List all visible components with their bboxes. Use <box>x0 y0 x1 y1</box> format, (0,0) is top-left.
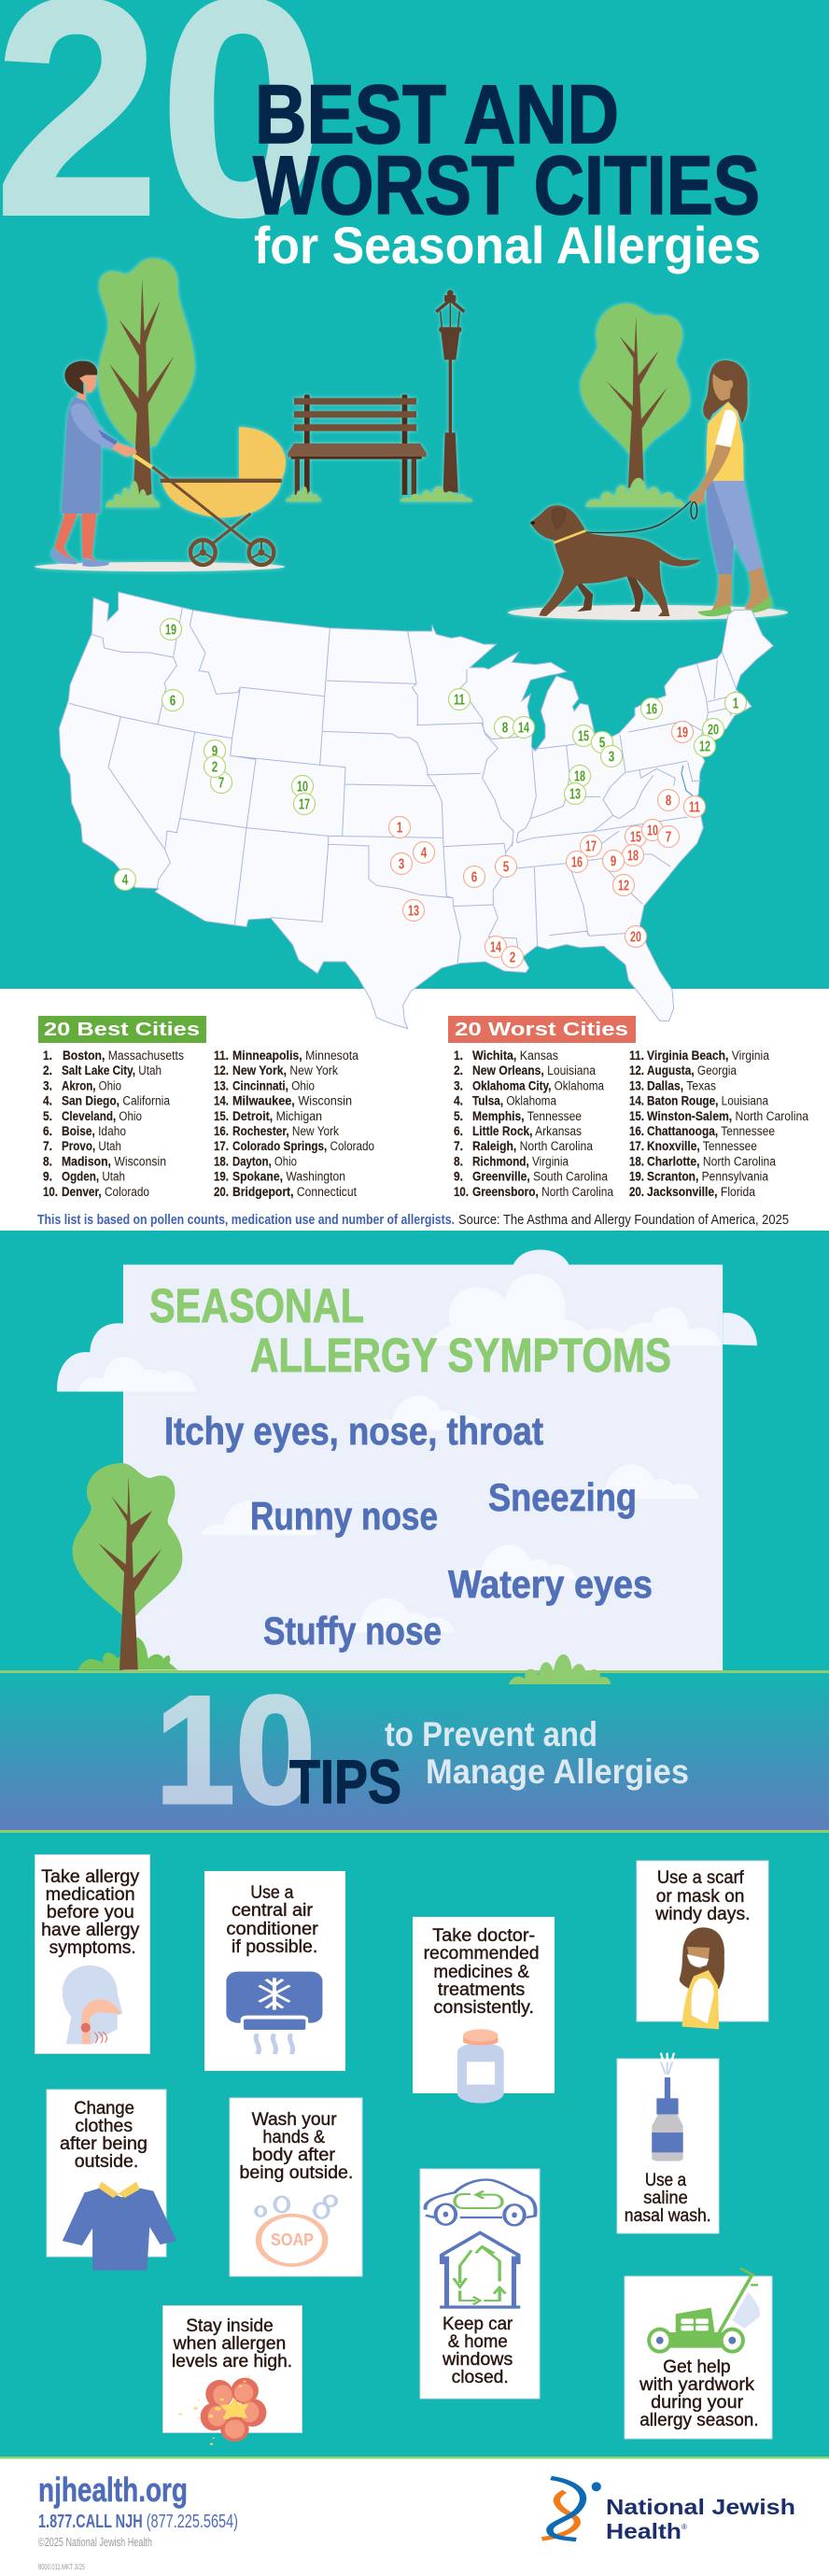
woman with stroller <box>51 361 286 567</box>
symptom: sneezing: Sneezing <box>488 1475 637 1519</box>
stroller band <box>161 479 282 483</box>
list: best cities 1 to 10 <box>43 1049 184 1199</box>
map markers: worst cities: 12 <box>618 878 629 894</box>
top <box>707 402 744 481</box>
card: yardwork <box>625 2268 772 2439</box>
card text <box>60 2099 148 2172</box>
list: best cities 11 to 20: Minneapolis, Minnesota <box>232 1049 358 1063</box>
card text: have allergy <box>41 1921 140 1940</box>
faint clouds <box>201 1396 699 1632</box>
map markers: worst cities: 16 <box>571 855 583 870</box>
list: best cities 1 to 10: 10. <box>43 1185 58 1199</box>
card text: outside. <box>75 2152 138 2172</box>
map markers: worst cities: 8 <box>666 794 672 809</box>
card text: Stay inside <box>186 2316 274 2336</box>
list: best cities 1 to 10: Salt Lake City, Utah <box>62 1063 162 1077</box>
sleeve <box>71 403 118 450</box>
list: best cities 1 to 10: 8. <box>43 1154 52 1168</box>
list: worst cities 11 to 20: 17. <box>629 1139 644 1153</box>
panel: footer <box>0 2456 829 2576</box>
map markers: worst cities: 19 <box>677 725 688 741</box>
sleeve <box>715 410 737 447</box>
panel box <box>123 1265 723 1670</box>
list: worst cities 11 to 20: 12. <box>629 1063 644 1077</box>
map markers: best cities: 6 <box>170 693 176 710</box>
hair <box>703 360 748 423</box>
list: best cities 1 to 10: 1. <box>43 1049 52 1063</box>
lamp post <box>436 290 464 492</box>
card text <box>226 1883 319 1957</box>
list: best cities 11 to 20 <box>214 1049 374 1199</box>
map markers: best cities: 15 <box>578 728 589 745</box>
list: best cities 11 to 20: Bridgeport, Connecticut <box>232 1185 357 1199</box>
icon: medicine bottle <box>457 2029 504 2104</box>
panel: teal header background <box>0 0 829 990</box>
ground ellipse right <box>508 605 788 620</box>
list: best cities 11 to 20: 20. <box>214 1185 229 1199</box>
card: scarf or mask <box>637 1861 768 2029</box>
list: best cities 11 to 20: 11. <box>214 1049 229 1063</box>
illustration: park scene <box>35 259 788 620</box>
list: best cities 1 to 10: 3. <box>43 1078 52 1092</box>
hair <box>64 361 97 394</box>
state borders <box>69 608 736 964</box>
list: worst cities 1 to 10: Greensboro, North Carolina <box>472 1185 613 1199</box>
icon: car and house <box>426 2180 536 2307</box>
bush on ground line <box>509 1654 611 1684</box>
card text: Use a <box>250 1883 294 1903</box>
card text: windy days. <box>654 1905 751 1924</box>
card text <box>424 1926 540 2018</box>
list: best cities 11 to 20: 16. <box>214 1124 229 1138</box>
card text: treatments <box>438 1980 525 2000</box>
map markers: worst cities: 17 <box>585 838 597 855</box>
icon: shirt <box>63 2182 176 2271</box>
list: worst cities 1 to 10: 10. <box>454 1185 469 1199</box>
card text: consistently. <box>433 1998 534 2018</box>
map markers: worst cities: 1 <box>397 820 403 837</box>
chesapeake bay <box>681 766 694 796</box>
card text <box>442 2315 513 2387</box>
logo <box>541 2478 795 2543</box>
heading: 20 best cities <box>38 1016 206 1043</box>
map markers: best cities: 3 <box>609 749 615 766</box>
list: best cities 11 to 20: Dayton, Ohio <box>232 1154 297 1168</box>
woman walking dog <box>585 360 773 616</box>
heading: 20 worst cities: 20 Worst Cities <box>455 1020 628 1040</box>
symptom: stuffy nose: Stuffy nose <box>263 1609 442 1653</box>
list: worst cities 11 to 20: Chattanooga, Tennessee <box>647 1124 775 1138</box>
card text <box>625 2171 711 2226</box>
list: worst cities 1 to 10: 4. <box>454 1094 463 1108</box>
card text: levels are high. <box>172 2352 292 2372</box>
map markers: worst cities: 10 <box>647 823 658 838</box>
card text: recommended <box>424 1944 540 1964</box>
card text: saline <box>643 2189 688 2208</box>
list: best cities 11 to 20: 15. <box>214 1109 229 1123</box>
map markers: best cities: 17 <box>299 797 310 812</box>
pants <box>707 481 763 574</box>
card text: allergy season. <box>639 2411 759 2430</box>
map markers: worst cities: 14 <box>490 939 501 956</box>
list: best cities 1 to 10: Provo, Utah <box>62 1139 121 1153</box>
card: saline nasal wash <box>617 2053 719 2233</box>
list: best cities 1 to 10: 2. <box>43 1063 52 1077</box>
map markers: worst cities: 20 <box>630 930 641 945</box>
phone: 1.877.CALL NJH (877.225.5654) <box>38 2512 238 2532</box>
list: worst cities 1 to 10: New Orleans, Louisiana <box>472 1063 596 1077</box>
dog collar <box>554 530 585 542</box>
map markers: worst cities: 6 <box>471 870 478 885</box>
panel: teal lower background <box>0 1231 829 2456</box>
list: worst cities 1 to 10: 5. <box>454 1109 463 1123</box>
number 10: 10 <box>155 1664 316 1836</box>
card text: during your <box>651 2393 744 2413</box>
map markers: best cities <box>114 618 747 891</box>
dog body <box>530 505 701 616</box>
list: best cities 11 to 20: Detroit, Michigan <box>232 1109 322 1123</box>
map outline <box>59 592 773 1029</box>
panel: seasonal allergy symptoms <box>57 1250 757 1670</box>
list: worst cities 11 to 20: Virginia Beach, Virginia <box>647 1049 769 1063</box>
dog <box>530 505 701 616</box>
map markers: best cities: 19 <box>165 622 176 639</box>
stroller hood <box>239 427 286 479</box>
subtitle: for Seasonal Allergies <box>254 216 761 274</box>
list: best cities 11 to 20: 19. <box>214 1170 229 1184</box>
map markers: worst cities: 4 <box>421 846 428 861</box>
card: take allergy medication <box>35 1854 149 2054</box>
tree right <box>581 303 690 487</box>
illustration: tree beside symptoms <box>73 1463 182 1669</box>
list: best cities 11 to 20: Milwaukee, Wisconsin <box>232 1094 352 1108</box>
tree left <box>98 259 194 496</box>
list: worst cities 1 to 10: 1. <box>454 1049 463 1063</box>
title line: best and: BEST AND <box>255 67 619 161</box>
list: worst cities 1 to 10: 9. <box>454 1170 463 1184</box>
list: worst cities 11 to 20: 13. <box>629 1078 644 1092</box>
card text: Change <box>74 2099 134 2119</box>
card text: central air <box>232 1901 314 1921</box>
ground line <box>0 1670 829 1673</box>
symptom: runny nose: Runny nose <box>250 1494 438 1538</box>
list: best cities 1 to 10: Ogden, Utah <box>62 1170 125 1184</box>
list: best cities 11 to 20: 14. <box>214 1094 229 1108</box>
map markers: worst cities <box>388 721 706 967</box>
shoes <box>697 596 773 616</box>
list: worst cities 11 to 20: Knoxville, Tennessee <box>647 1139 757 1153</box>
icon: soap and bubbles <box>256 2196 336 2265</box>
document code: 8000.011.MKT 3/25 <box>38 2563 85 2571</box>
bush under bench <box>286 486 321 501</box>
card text: hands & <box>262 2128 325 2147</box>
card text <box>239 2110 353 2183</box>
card text: after being <box>60 2134 148 2154</box>
card text: conditioner <box>226 1920 319 1939</box>
list: worst cities 11 to 20 <box>629 1049 808 1199</box>
heading: seasonal: SEASONAL <box>149 1279 364 1332</box>
cloud top <box>513 1250 569 1265</box>
map markers: best cities: 18 <box>574 769 585 784</box>
card text: nasal wash. <box>625 2206 711 2226</box>
card text: & home <box>448 2332 508 2352</box>
logo name line 2: Health <box>606 2519 681 2543</box>
card text: Use a scarf <box>657 1868 744 1888</box>
card: doctor recommended medicines <box>413 1917 555 2104</box>
map markers: best cities: 7 <box>218 775 224 792</box>
card text: Use a <box>645 2171 686 2190</box>
heading: 20 worst cities <box>448 1016 636 1043</box>
icon: head and throat <box>63 1965 122 2044</box>
list: best cities 1 to 10: Boston, Massachusetts <box>63 1049 184 1063</box>
map markers: best cities: 8 <box>502 721 509 736</box>
card text <box>41 1867 140 1958</box>
card text <box>172 2316 292 2372</box>
band: 10 tips background <box>0 1672 829 1830</box>
map markers: worst cities: 5 <box>503 859 510 876</box>
map markers: worst cities: 9 <box>611 853 617 870</box>
map markers: best cities: 14 <box>518 721 529 736</box>
list: best cities 11 to 20: 12. <box>214 1063 229 1077</box>
map markers: best cities: 13 <box>569 786 581 803</box>
symptom: watery eyes: Watery eyes <box>448 1562 653 1606</box>
list: best cities 1 to 10: Boise, Idaho <box>62 1124 126 1138</box>
heading: 10 tips <box>155 1664 689 1836</box>
map markers: worst cities: 13 <box>408 904 419 919</box>
stroller wheels <box>190 540 274 565</box>
legs <box>711 567 770 611</box>
list: best cities 1 to 10: 7. <box>43 1139 52 1153</box>
legs <box>54 514 98 562</box>
map of the United States <box>59 592 773 1029</box>
card text: being outside. <box>239 2163 353 2183</box>
list: worst cities 1 to 10: 7. <box>454 1139 463 1153</box>
card: central air conditioner <box>204 1871 345 2071</box>
card text: before you <box>47 1903 134 1922</box>
card text: when allergen <box>173 2334 286 2354</box>
card text: or mask on <box>656 1887 744 1907</box>
card text: if possible. <box>232 1937 317 1957</box>
soap label: SOAP <box>271 2231 314 2249</box>
map markers: best cities: 11 <box>454 693 465 708</box>
list: worst cities 1 to 10: 3. <box>454 1078 463 1092</box>
logo name line 1: National Jewish <box>606 2495 795 2519</box>
list: best cities 1 to 10: 9. <box>43 1170 52 1184</box>
dog ear <box>552 509 566 529</box>
list: best cities 11 to 20: 13. <box>214 1078 229 1092</box>
list: worst cities 11 to 20: Scranton, Pennsylvania <box>647 1170 768 1184</box>
card text: body after <box>252 2146 336 2165</box>
arm <box>688 444 731 504</box>
stroller frame <box>152 467 250 544</box>
list: best cities 1 to 10: Madison, Wisconsin <box>62 1154 166 1168</box>
source note: This list is based on pollen counts, medication use and number of allergists. <box>37 1213 455 1228</box>
sleeve shadow <box>98 429 118 445</box>
map markers: best cities: 20 <box>708 723 719 738</box>
card text: closed. <box>452 2368 509 2387</box>
pants shadow <box>707 481 734 574</box>
list: worst cities 11 to 20: 15. <box>629 1109 644 1123</box>
list: worst cities 1 to 10: 8. <box>454 1154 463 1168</box>
card text: symptoms. <box>49 1938 136 1958</box>
copyright: ©2025 National Jewish Health <box>38 2536 152 2549</box>
card text: windows <box>442 2350 513 2370</box>
band bottom stripe <box>0 1830 829 1833</box>
card text: medication <box>46 1885 135 1905</box>
list: worst cities 1 to 10: Raleigh, North Carolina <box>472 1139 593 1153</box>
list: worst cities 1 to 10: 2. <box>454 1063 463 1077</box>
card: wash hands and body <box>230 2098 362 2276</box>
dog nose <box>530 521 535 525</box>
list: worst cities 1 to 10 <box>454 1049 613 1199</box>
list: worst cities 11 to 20: Jacksonville, Florida <box>647 1185 755 1199</box>
list: worst cities 11 to 20: Charlotte, North Carolina <box>647 1154 776 1168</box>
list: worst cities 11 to 20: 16. <box>629 1124 644 1138</box>
face <box>78 374 96 393</box>
list: best cities 1 to 10: San Diego, California <box>62 1094 170 1108</box>
card text: clothes <box>75 2117 133 2136</box>
dog far legs <box>577 576 643 612</box>
list: worst cities 1 to 10: 6. <box>454 1124 463 1138</box>
map markers: best cities: 1 <box>733 697 739 711</box>
hand <box>112 443 137 457</box>
cloud outer right <box>723 1313 757 1345</box>
list: worst cities 11 to 20: 20. <box>629 1185 644 1199</box>
list: best cities 1 to 10: 4. <box>43 1094 52 1108</box>
map markers: worst cities: 7 <box>666 829 671 846</box>
list: worst cities 1 to 10: Richmond, Virginia <box>472 1154 569 1168</box>
card text: with yardwork <box>639 2375 755 2395</box>
logo symbol <box>541 2478 601 2540</box>
list: best cities 11 to 20: Cincinnati, Ohio <box>232 1078 315 1092</box>
list: worst cities 11 to 20: Winston-Salem, North Carolina <box>647 1109 808 1123</box>
cloud outer left <box>57 1323 124 1391</box>
dress <box>62 397 103 514</box>
map markers: worst cities: 11 <box>689 799 700 816</box>
list: worst cities 1 to 10: Tulsa, Oklahoma <box>472 1094 556 1108</box>
list: worst cities 11 to 20: 19. <box>629 1170 644 1184</box>
list: best cities 11 to 20: 17. <box>214 1139 229 1153</box>
card text <box>654 1868 751 1924</box>
list: best cities 1 to 10: Akron, Ohio <box>62 1078 121 1092</box>
list: best cities 1 to 10: 6. <box>43 1124 52 1138</box>
card text: Wash your <box>252 2110 337 2130</box>
card: stay inside <box>162 2306 302 2445</box>
list: worst cities 11 to 20: 14. <box>629 1094 644 1108</box>
neck <box>77 392 86 401</box>
list: best cities 1 to 10: Denver, Colorado <box>62 1185 149 1199</box>
map markers: best cities: 10 <box>297 779 308 795</box>
symptom: itchy: Itchy eyes, nose, throat <box>164 1409 543 1453</box>
icon: lawn mower <box>647 2268 760 2354</box>
list: worst cities 11 to 20: Augusta, Georgia <box>647 1063 737 1077</box>
list: best cities 1 to 10: Cleveland, Ohio <box>62 1109 142 1123</box>
list: worst cities 1 to 10: Greenville, South Carolina <box>472 1170 608 1184</box>
face <box>712 373 733 401</box>
to prevent and: to Prevent and <box>385 1715 597 1753</box>
website: njhealth.org <box>38 2470 188 2509</box>
list: best cities 11 to 20: Spokane, Washington <box>232 1170 345 1184</box>
map markers: best cities: 12 <box>699 739 710 754</box>
icon: air conditioner <box>226 1972 322 2054</box>
source note: Source: The Asthma and Allergy Foundation of America, 2025 <box>458 1213 789 1228</box>
stroller basket <box>162 481 282 517</box>
map markers: worst cities: 3 <box>399 857 405 872</box>
list: worst cities 11 to 20: 11. <box>629 1049 644 1063</box>
icon: nasal spray <box>652 2053 683 2161</box>
map markers: worst cities: 18 <box>627 848 639 865</box>
bush under lamp <box>400 486 472 501</box>
list: best cities 1 to 10: 5. <box>43 1109 52 1123</box>
list: best cities 11 to 20: New York, New York <box>232 1063 338 1077</box>
word tips: TIPS <box>289 1747 401 1816</box>
map markers: best cities: 5 <box>599 736 606 751</box>
cloud inner left <box>78 1357 197 1391</box>
list: worst cities 11 to 20: Dallas, Texas <box>647 1078 716 1092</box>
card text: Take doctor- <box>432 1926 535 1946</box>
heading: 20 best cities: 20 Best Cities <box>44 1020 200 1040</box>
map markers: best cities: 2 <box>212 760 218 775</box>
bush under right tree <box>585 478 684 507</box>
heading: allergy symptoms: ALLERGY SYMPTOMS <box>250 1329 671 1382</box>
card text <box>639 2358 759 2430</box>
map markers: best cities: 4 <box>122 872 129 889</box>
panel: white cities section <box>0 989 829 1231</box>
map markers: best cities: 9 <box>212 743 218 760</box>
card text: Get help <box>663 2358 731 2377</box>
registered mark: ® <box>681 2523 687 2531</box>
list: worst cities 11 to 20: Baton Rouge, Louisiana <box>647 1094 768 1108</box>
card text: medicines & <box>433 1963 529 1982</box>
card text: Take allergy <box>41 1867 140 1887</box>
icon: pollen flower <box>178 2375 266 2445</box>
list: worst cities 11 to 20: 18. <box>629 1154 644 1168</box>
cloud inner right <box>429 1274 722 1345</box>
ground ellipse left <box>35 562 285 571</box>
list: best cities 11 to 20: Rochester, New York <box>232 1124 339 1138</box>
list: best cities 11 to 20: Colorado Springs, Colorado <box>232 1139 374 1153</box>
list: worst cities 1 to 10: Oklahoma City, Oklahoma <box>472 1078 604 1092</box>
bush under left tree <box>105 481 160 507</box>
list: worst cities 1 to 10: Little Rock, Arkansas <box>472 1124 582 1138</box>
leash <box>585 501 691 533</box>
card: change clothes <box>47 2090 176 2271</box>
map markers: worst cities: 15 <box>630 829 641 846</box>
stroller handle <box>133 455 152 468</box>
source note <box>37 1213 789 1228</box>
icon: woman with mask <box>680 1927 724 2029</box>
card: keep windows closed <box>420 2169 540 2399</box>
shoes <box>51 548 109 567</box>
manage allergies: Manage Allergies <box>426 1753 689 1791</box>
map markers: worst cities: 2 <box>510 950 515 965</box>
card text: Keep car <box>443 2315 513 2334</box>
list: worst cities 1 to 10: Memphis, Tennessee <box>472 1109 582 1123</box>
title <box>0 0 761 279</box>
map markers: best cities: 16 <box>646 702 657 717</box>
bench <box>288 395 427 495</box>
list: worst cities 1 to 10: Wichita, Kansas <box>472 1049 558 1063</box>
list: best cities 11 to 20: 18. <box>214 1154 229 1168</box>
